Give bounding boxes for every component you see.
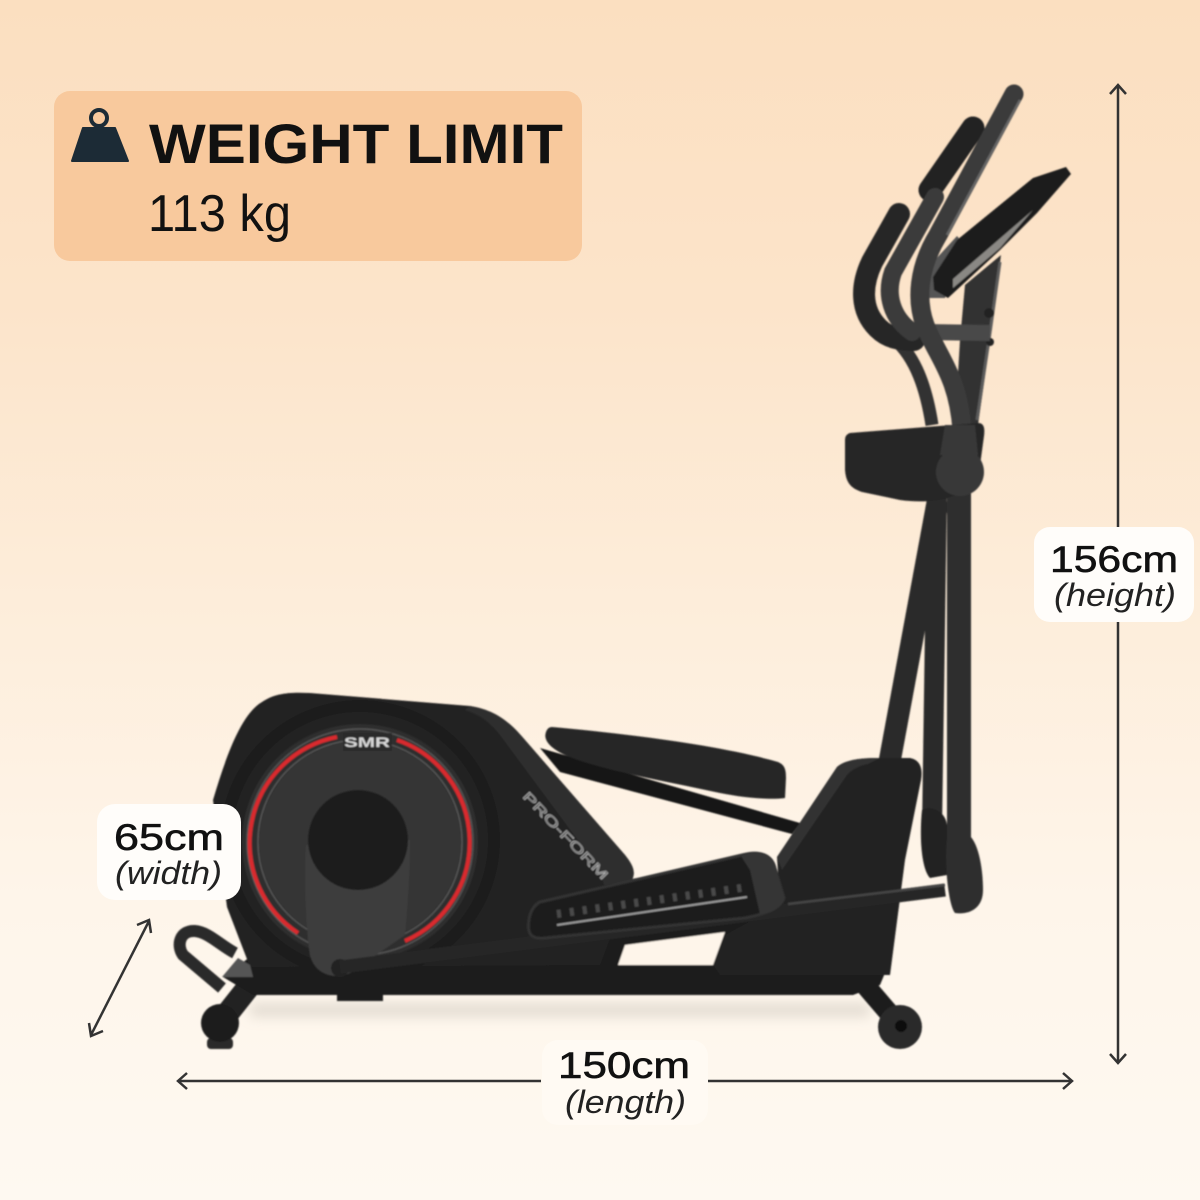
front wheel <box>865 985 922 1049</box>
height caption: (height) <box>1054 577 1176 613</box>
elliptical machine <box>180 94 1071 1049</box>
console post <box>955 255 1001 425</box>
label: length <box>542 1040 708 1125</box>
crank arm <box>305 790 410 977</box>
PRO-FORM logo: PRO-FORM <box>520 789 611 883</box>
inclined front tube <box>888 500 938 770</box>
arrow: length <box>178 1073 1072 1089</box>
SMR badge: SMR <box>344 734 390 750</box>
rear stabilizer rail <box>220 985 250 1023</box>
arrow: height <box>1110 85 1126 1063</box>
heading: weight limit: WEIGHT LIMIT <box>149 112 563 175</box>
far pedal and rod <box>540 727 800 834</box>
shroud <box>213 693 634 974</box>
width value: 65cm <box>114 817 224 858</box>
inner handle <box>890 197 935 332</box>
length caption: (length) <box>565 1084 686 1120</box>
connecting rod <box>340 885 945 967</box>
rear block <box>222 958 253 977</box>
rear upright <box>713 758 922 975</box>
value: 113 kg: 113 kg <box>148 185 291 243</box>
width caption: (width) <box>115 855 222 891</box>
icon: kettle weight <box>72 110 128 161</box>
main handle <box>920 94 1020 470</box>
floor shadow <box>250 1003 870 1017</box>
handle grip far <box>930 128 973 190</box>
handle pivot <box>936 425 984 496</box>
rear handle tube <box>890 335 932 425</box>
panel: weight limit <box>54 91 582 261</box>
cross bar <box>925 332 990 333</box>
length value: 150cm <box>558 1045 690 1086</box>
front end cap <box>921 808 983 913</box>
rear transport handle <box>180 931 235 988</box>
label: width <box>97 804 241 900</box>
arrow: width <box>89 920 151 1036</box>
height value: 156cm <box>1050 539 1178 580</box>
label: height <box>1034 527 1194 622</box>
flywheel <box>242 724 478 960</box>
handle grip left <box>864 214 914 340</box>
thin front tube <box>932 490 937 830</box>
base frame <box>223 880 900 1001</box>
rear foot <box>201 1004 239 1049</box>
console <box>912 167 1071 298</box>
window under rod <box>618 932 725 965</box>
near pedal <box>528 853 784 938</box>
SMR badge <box>343 733 392 751</box>
bottle tray <box>845 423 984 501</box>
flywheel red arcs <box>250 737 470 941</box>
front tube <box>947 470 971 850</box>
